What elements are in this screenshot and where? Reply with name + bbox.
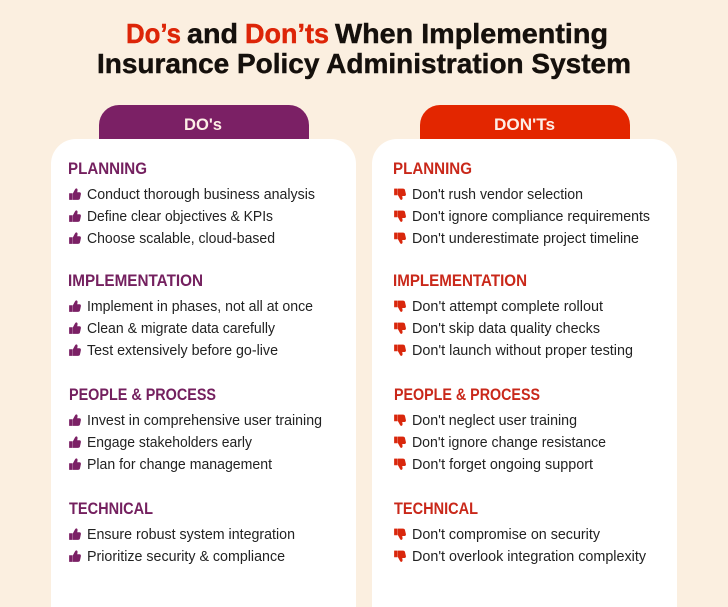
section: people and process [394, 385, 606, 473]
title: Don’ts [245, 18, 329, 49]
section: planning: Don't underestimate project timeline [412, 230, 639, 247]
title: Insurance Policy Administration System [97, 48, 631, 79]
section: technical: Don't compromise on security [412, 526, 600, 543]
section: implementation: IMPLEMENTATION [393, 271, 527, 290]
section: planning: Don't ignore compliance requirements [412, 208, 650, 225]
section: technical: TECHNICAL [69, 499, 153, 518]
section: implementation [68, 271, 313, 359]
section: technical: TECHNICAL [394, 499, 478, 518]
section: people and process: Don't ignore change resistance [412, 434, 606, 451]
section: people and process: PEOPLE & PROCESS [394, 385, 540, 404]
section: people and process: Plan for change management [87, 456, 273, 473]
section: implementation: Implement in phases, not all at once [87, 298, 313, 315]
section: implementation: Don't attempt complete rollout [412, 298, 604, 315]
section: people and process: PEOPLE & PROCESS [69, 385, 216, 404]
section: people and process: Invest in comprehensive user training [87, 412, 322, 429]
section: people and process [69, 385, 322, 473]
section: technical: Prioritize security & compliance [87, 548, 285, 565]
section: technical: Don't overlook integration complexity [412, 548, 646, 565]
section: technical [69, 499, 295, 565]
tab: DO's [99, 105, 309, 139]
title: When Implementing [335, 18, 608, 49]
panel: DO's [51, 139, 356, 607]
section: planning: Define clear objectives & KPIs [87, 208, 273, 225]
section: implementation: Test extensively before go-live [87, 342, 278, 359]
tab: DON'Ts: DON'Ts [494, 115, 555, 134]
title [97, 18, 631, 79]
section: planning: PLANNING [68, 159, 147, 178]
tab: DO's: DO's [184, 115, 222, 134]
title: and [187, 18, 238, 49]
section: planning [393, 159, 650, 247]
section: implementation: Don't launch without proper testing [412, 342, 633, 359]
section: planning [68, 159, 315, 247]
section: technical [394, 499, 646, 565]
section: implementation: Clean & migrate data carefully [87, 320, 275, 337]
title: Do’s [126, 18, 181, 49]
section: people and process: Don't neglect user training [412, 412, 577, 429]
section: planning: Conduct thorough business analysis [87, 186, 315, 203]
section: people and process: Engage stakeholders early [87, 434, 252, 451]
section: implementation: IMPLEMENTATION [68, 271, 203, 290]
section: planning: PLANNING [393, 159, 472, 178]
section: planning: Don't rush vendor selection [412, 186, 583, 203]
section: people and process: Don't forget ongoing support [412, 456, 594, 473]
section: implementation: Don't skip data quality checks [412, 320, 600, 337]
section: planning: Choose scalable, cloud-based [87, 230, 275, 247]
section: technical: Ensure robust system integration [87, 526, 295, 543]
section: implementation [393, 271, 633, 359]
tab: DON'Ts [420, 105, 630, 139]
panel: DON'Ts [372, 139, 677, 607]
